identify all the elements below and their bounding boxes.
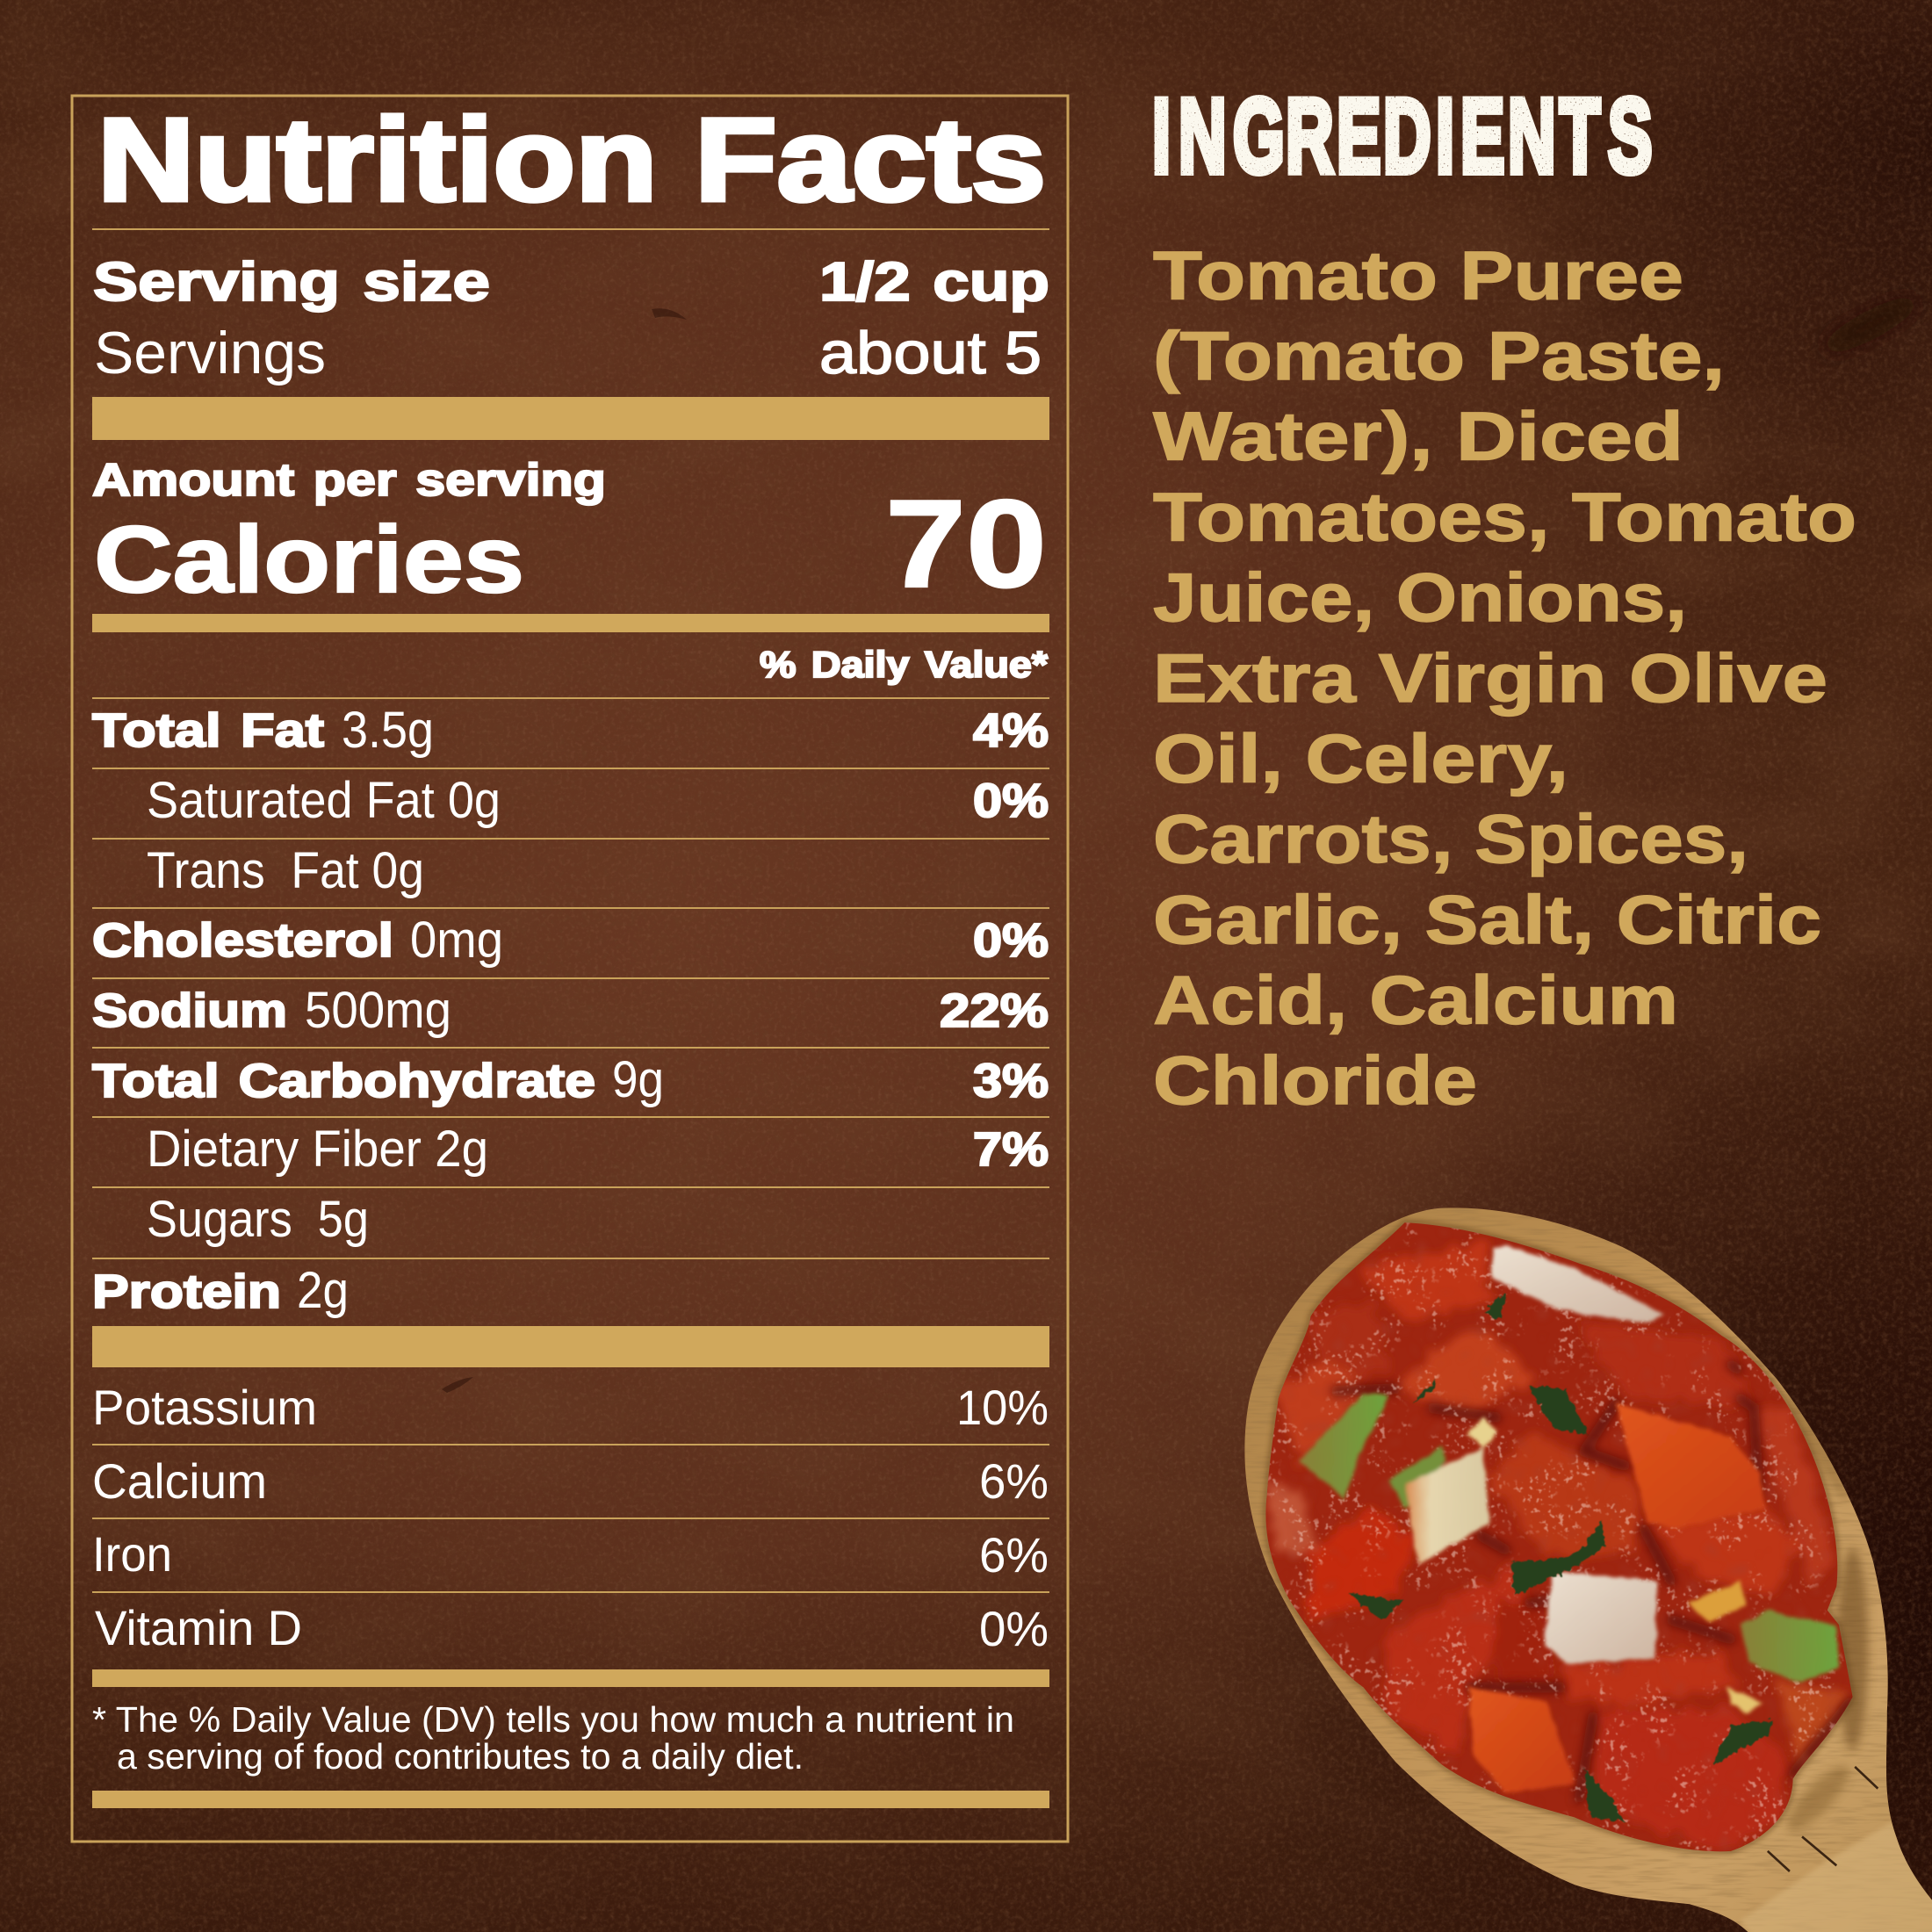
serving size row: 1/2 cup <box>819 252 1049 313</box>
amount per serving label: Amount per serving <box>92 455 606 506</box>
row: total carbohydrate <box>92 1051 1049 1108</box>
servings row: about 5 <box>819 320 1042 386</box>
row: sugars: Sugars 5g <box>147 1191 369 1248</box>
row: total fat: Total Fat <box>92 704 324 757</box>
vegetables <box>1299 1245 1839 1793</box>
gold bar <box>92 1791 1049 1808</box>
row: trans fat: Trans Fat 0g <box>147 842 424 899</box>
row: iron: 6% <box>979 1527 1049 1582</box>
row: total fat: 4% <box>973 704 1049 757</box>
serving size row: Serving size <box>93 252 490 313</box>
row: sodium: Sodium <box>92 984 287 1037</box>
row: dietary fiber: Dietary Fiber 2g <box>147 1121 488 1178</box>
ingredients list: Water), Diced <box>1153 397 1683 474</box>
nutrient row dividers <box>92 697 1049 1259</box>
sauce chunks <box>1267 1239 1850 1849</box>
heading: Nutrition Facts: Nutrition Facts <box>97 95 1046 226</box>
divider under heading <box>92 228 1049 230</box>
row: calcium <box>92 1453 1049 1509</box>
row: vitamin d: 0% <box>979 1601 1049 1656</box>
row: cholesterol: 0% <box>973 914 1049 967</box>
row: total carbohydrate: 3% <box>973 1055 1049 1107</box>
sauce <box>1266 1222 1853 1851</box>
footnote: a serving of food contributes to a daily diet. <box>117 1736 804 1777</box>
row: vitamin d <box>95 1600 1049 1656</box>
ingredients list: Tomatoes, Tomato <box>1153 478 1856 555</box>
row: sodium: 22% <box>940 984 1049 1037</box>
calories row: 70 <box>885 474 1047 614</box>
row: vitamin d: Vitamin D <box>95 1600 302 1655</box>
row: iron: Iron <box>92 1526 172 1582</box>
ingredients list: Carrots, Spices, <box>1153 800 1748 877</box>
row: saturated fat: 0% <box>973 775 1049 827</box>
row: protein: 2g <box>297 1262 349 1319</box>
row: potassium: 10% <box>956 1380 1049 1435</box>
servings row <box>94 320 1042 386</box>
row: total fat: 3.5g <box>342 702 434 759</box>
gold bar <box>92 397 1049 440</box>
serving size row <box>93 252 1049 313</box>
row: cholesterol <box>92 912 1049 969</box>
ingredients list: Acid, Calcium <box>1153 961 1678 1038</box>
ingredients list: (Tomato Paste, <box>1153 317 1725 394</box>
row: sodium: 500mg <box>305 982 451 1039</box>
row: calcium: 6% <box>979 1453 1049 1509</box>
ingredients list: Extra Virgin Olive <box>1153 639 1827 717</box>
ingredients list <box>1153 237 1856 1119</box>
row: dietary fiber: 7% <box>973 1123 1049 1176</box>
row: saturated fat: Saturated Fat 0g <box>147 772 501 829</box>
footnote: * The % Daily Value (DV) tells you how much a nutrient in <box>92 1699 1014 1740</box>
ingredients list: Garlic, Salt, Citric <box>1153 881 1821 958</box>
gold bar <box>92 614 1049 632</box>
sauce highlights <box>1266 1222 1844 1851</box>
ingredients list: Tomato Puree <box>1153 237 1683 314</box>
row: potassium <box>92 1380 1049 1435</box>
panel: nutrition facts <box>72 95 1068 1842</box>
daily value header: % Daily Value* <box>760 644 1049 685</box>
row: total fat <box>92 702 1049 759</box>
row: protein: Protein <box>92 1265 281 1318</box>
footnote <box>92 1699 1014 1777</box>
row: iron <box>92 1526 1049 1582</box>
row: protein <box>92 1262 349 1319</box>
ingredients list: Oil, Celery, <box>1153 720 1568 797</box>
row: potassium: Potassium <box>92 1380 317 1435</box>
sauce crevices <box>1336 1365 1850 1799</box>
row: sodium <box>92 982 1049 1039</box>
row: dietary fiber <box>147 1121 1049 1178</box>
row: total carbohydrate: 9g <box>612 1051 664 1108</box>
herbs <box>1350 1293 1772 1822</box>
servings row: Servings <box>94 320 326 386</box>
ingredients list: Chloride <box>1153 1042 1477 1119</box>
heading: Ingredients: INGREDIENTS <box>1152 77 1652 195</box>
ingredients list: Juice, Onions, <box>1153 559 1687 636</box>
row: cholesterol: Cholesterol <box>92 914 393 967</box>
spoon <box>1212 1177 1932 1932</box>
row: saturated fat <box>147 772 1049 829</box>
icon: wooden spoon of tomato sauce <box>1212 1177 1932 1932</box>
calories row <box>94 474 1047 614</box>
gold bar <box>92 1326 1049 1367</box>
row: total carbohydrate: Total Carbohydrate <box>92 1055 595 1107</box>
row: calcium: Calcium <box>92 1453 267 1509</box>
calories row: Calories <box>94 506 524 612</box>
lower row dividers <box>92 1444 1049 1593</box>
gold bar <box>92 1669 1049 1687</box>
row: cholesterol: 0mg <box>410 912 503 969</box>
panel border <box>72 96 1068 1842</box>
